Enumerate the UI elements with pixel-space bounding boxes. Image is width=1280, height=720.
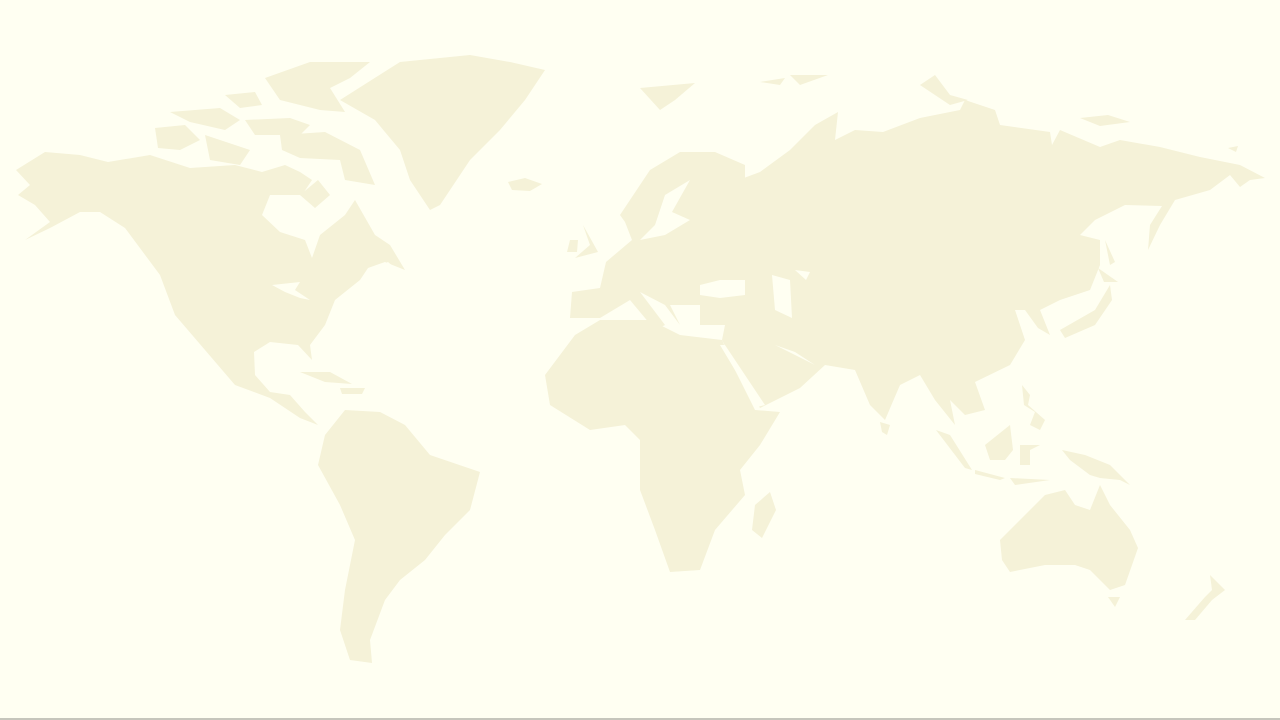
continent: Eurasia <box>570 100 1265 425</box>
continent: Australia <box>1000 485 1138 590</box>
Iceland <box>508 178 542 191</box>
islands <box>567 75 1238 620</box>
inland seas <box>640 180 815 365</box>
continent: South America <box>318 410 480 663</box>
Madagascar <box>752 492 776 538</box>
Greenland <box>340 55 545 210</box>
Great Lakes <box>272 262 395 300</box>
bottom edge line <box>0 718 1280 720</box>
continent: North America <box>16 62 405 425</box>
Red Sea <box>720 345 765 407</box>
continent: Africa <box>545 320 780 572</box>
